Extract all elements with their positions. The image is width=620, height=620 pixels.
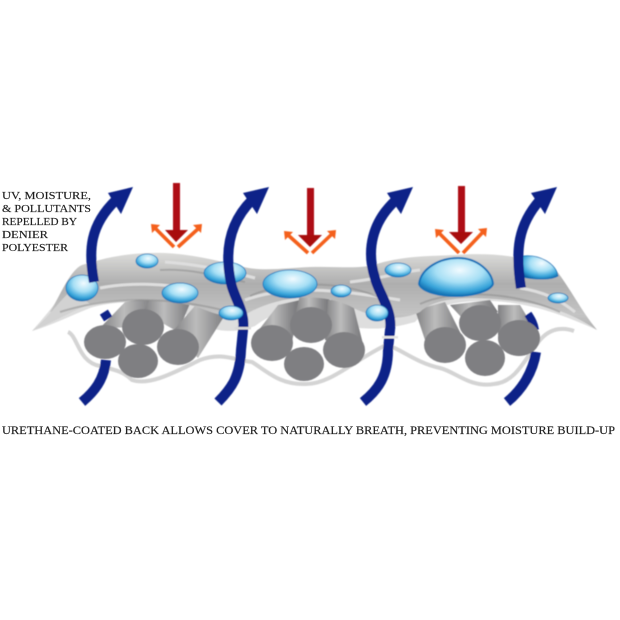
text: repelled callout [2, 190, 91, 254]
text: repelled callout: REPELLED BY [2, 216, 77, 228]
fabric under layer [32, 275, 597, 331]
water droplets in front of arrows [219, 305, 388, 321]
arrow: blue airflow 1 upper part [91, 187, 133, 282]
lower wavy backing layer [68, 329, 574, 385]
cylinders: left group [84, 290, 232, 378]
arrow: blue airflow 3 [363, 187, 413, 402]
fabric top layer [50, 253, 597, 330]
arrow: orange deflection 1 [151, 224, 202, 247]
arrow: blue airflow 1 lower part [82, 360, 106, 402]
text: repelled callout: DENIER [2, 229, 49, 241]
arrow: orange deflection 3 [435, 228, 487, 253]
text: bottom caption: URETHANE-COATED BACK ALLOWS COVER TO NATURALLY BREATH, PREVENTING MOISTURE BUILD-UP [2, 425, 615, 437]
arrow: red impact 3 [449, 186, 473, 244]
water droplets behind arrows [66, 254, 568, 303]
text: repelled callout: POLYESTER [2, 242, 69, 254]
arrow: orange deflection 2 [284, 230, 336, 253]
cylinders: right group [415, 300, 540, 376]
text: repelled callout: & POLLUTANTS [2, 203, 91, 215]
diagram artwork [32, 183, 597, 402]
arrow: blue airflow 4 lower part [498, 314, 540, 402]
arrow: blue airflow 1 small piece [102, 313, 110, 318]
arrow: red impact 1 [165, 183, 188, 242]
cylinders: middle group [251, 295, 365, 381]
fabric dark streaks [60, 270, 560, 312]
fabric sheen streaks [100, 262, 575, 312]
text: repelled callout: UV, MOISTURE, [2, 190, 91, 202]
arrow: blue airflow 2 [218, 187, 269, 402]
arrow: red impact 2 [298, 188, 322, 247]
arrow: blue airflow 4 upper part [518, 187, 557, 288]
fabric left flap [32, 290, 90, 331]
